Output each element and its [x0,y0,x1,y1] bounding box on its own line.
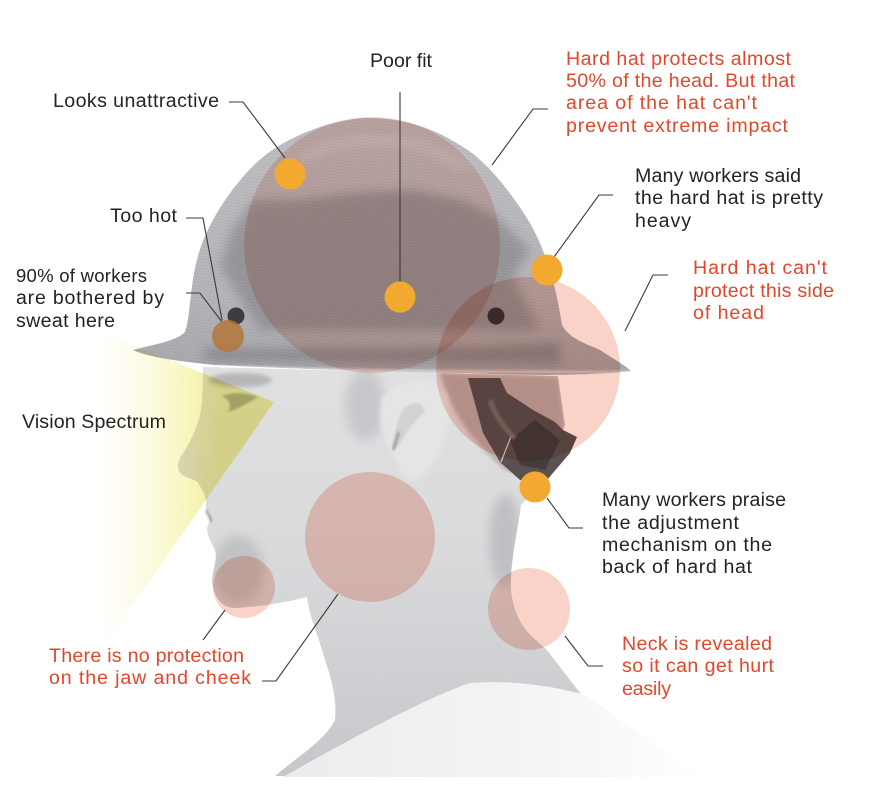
label: poor fit: Poor fit [370,50,433,72]
leader: looks unattractive [229,102,285,158]
text block: neck: Neck is revealed [622,633,772,655]
leader: neck [565,636,603,666]
marker: sweat dot [212,320,244,352]
text block: sweat [16,265,164,332]
text block: hat protects almost half of head: area of the hat can't [566,92,758,114]
text block: hat protects almost half of head: prevent extreme impact [566,115,789,137]
text block: sweat: are bothered by [16,287,164,309]
photo: man's head and neck in profile [178,367,600,776]
risk zone: jaw circle [213,556,275,618]
text block: sweat: 90% of workers [16,265,147,286]
icon: left hat vent [228,308,244,324]
text block: adjustment mechanism praise: Many workers praise [602,489,786,511]
icon: right hat vent [488,308,504,324]
text block: hat protects almost half of head [566,48,796,137]
leader: cheek [262,594,338,681]
leader: sweat [186,293,222,322]
vision spectrum cone [100,332,274,638]
marker: looks unattractive dot [274,158,306,190]
text block: jaw and cheek: on the jaw and cheek [49,667,251,689]
text block: adjustment mechanism praise [602,489,786,578]
text block: hat is heavy: the hard hat is pretty [635,187,823,209]
risk zone: cheek circle [305,472,435,602]
marker: heavy dot [532,254,562,286]
risk zone: top of head circle [244,117,500,373]
text block: hat protects almost half of head: Hard hat protects almost [566,48,792,70]
text block: jaw and cheek: There is no protection [49,645,244,667]
text block: adjustment mechanism praise: mechanism on the [602,534,772,556]
text block: hat protects almost half of head: 50% of the head. But that [566,70,796,92]
leader: unprotected side of head [625,275,668,331]
risk zone: back of head circle [436,277,620,461]
text block: adjustment mechanism praise: the adjustment [602,512,740,534]
text block: side of head unprotected [693,257,834,324]
text block: adjustment mechanism praise: back of hard hat [602,556,753,578]
text block: neck [622,633,775,700]
leader: protects half of head [492,109,548,165]
photo: white shirt collar [283,682,705,777]
label: too hot: Too hot [110,205,178,227]
leader: too hot [186,218,222,320]
marker: adjustment mechanism dot [520,472,550,502]
photo: hard hat [130,110,640,380]
leader: poor fit [399,92,401,283]
text block: hat is heavy: Many workers said [635,165,801,187]
leader: jaw [203,610,225,640]
text block: jaw and cheek [49,645,251,689]
text block: sweat: sweat here [16,310,115,332]
leader: adjustment mechanism [547,498,583,528]
text block: neck: so it can get hurt [622,655,775,677]
text block: neck: easily [622,678,671,700]
photo: adjustment mechanism [468,378,577,480]
risk zone: neck circle [488,568,570,650]
text block: hat is heavy: heavy [635,210,691,232]
marker: poor fit dot [384,282,416,312]
text block: side of head unprotected: Hard hat can't [693,257,828,279]
leader: heavy [554,195,613,257]
label: looks unattractive: Looks unattractive [53,90,219,112]
text block: side of head unprotected: of head [693,302,764,324]
text block: side of head unprotected: protect this side [693,280,834,302]
text block: hat is heavy [635,165,823,232]
label: vision spectrum: Vision Spectrum [22,411,166,433]
